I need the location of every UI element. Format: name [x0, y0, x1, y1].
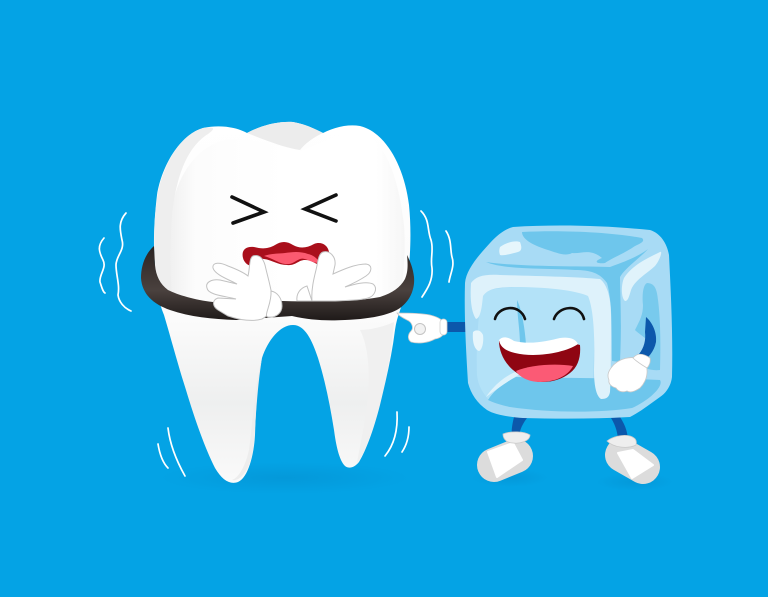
ice cube character	[397, 226, 672, 478]
tooth left hand	[207, 255, 282, 320]
ice right hand	[608, 354, 650, 392]
shaking lines around tooth	[99, 211, 453, 476]
right shoe	[607, 435, 653, 478]
band around tooth	[141, 246, 414, 320]
cube top sparkle	[499, 241, 521, 255]
cube body	[465, 226, 672, 419]
crown front face	[167, 132, 405, 305]
back cusp top face	[247, 122, 323, 150]
cube right highlight	[622, 252, 661, 301]
ground shadows	[160, 462, 673, 494]
ice right arm	[639, 317, 656, 362]
tooth open mouth	[243, 242, 329, 266]
cube highlight arch	[471, 275, 611, 399]
cube floor patch	[488, 377, 661, 412]
tooth character	[141, 122, 414, 483]
cube left sparkle	[473, 330, 483, 351]
cube top edge crease	[486, 249, 648, 362]
pointing arm	[446, 322, 470, 332]
left leg	[512, 417, 527, 440]
tooth right eye	[305, 195, 336, 221]
cube front panel	[477, 287, 594, 400]
left cusp shading	[154, 127, 213, 298]
root shading right	[357, 322, 394, 463]
right leg	[611, 417, 628, 442]
tooth right hand	[297, 252, 375, 301]
left shoe	[488, 432, 530, 477]
pointing hand	[397, 313, 447, 343]
cube centre crack	[517, 300, 526, 345]
cube floor crease	[486, 371, 520, 397]
tooth body	[154, 122, 410, 483]
ice left eye	[495, 308, 525, 319]
cube right dark patch	[635, 283, 660, 370]
tooth left eye	[232, 197, 264, 223]
ice laughing mouth	[499, 337, 580, 382]
ice right eye	[554, 308, 584, 319]
cube top dark patch	[522, 231, 643, 263]
root shading left	[232, 358, 262, 480]
